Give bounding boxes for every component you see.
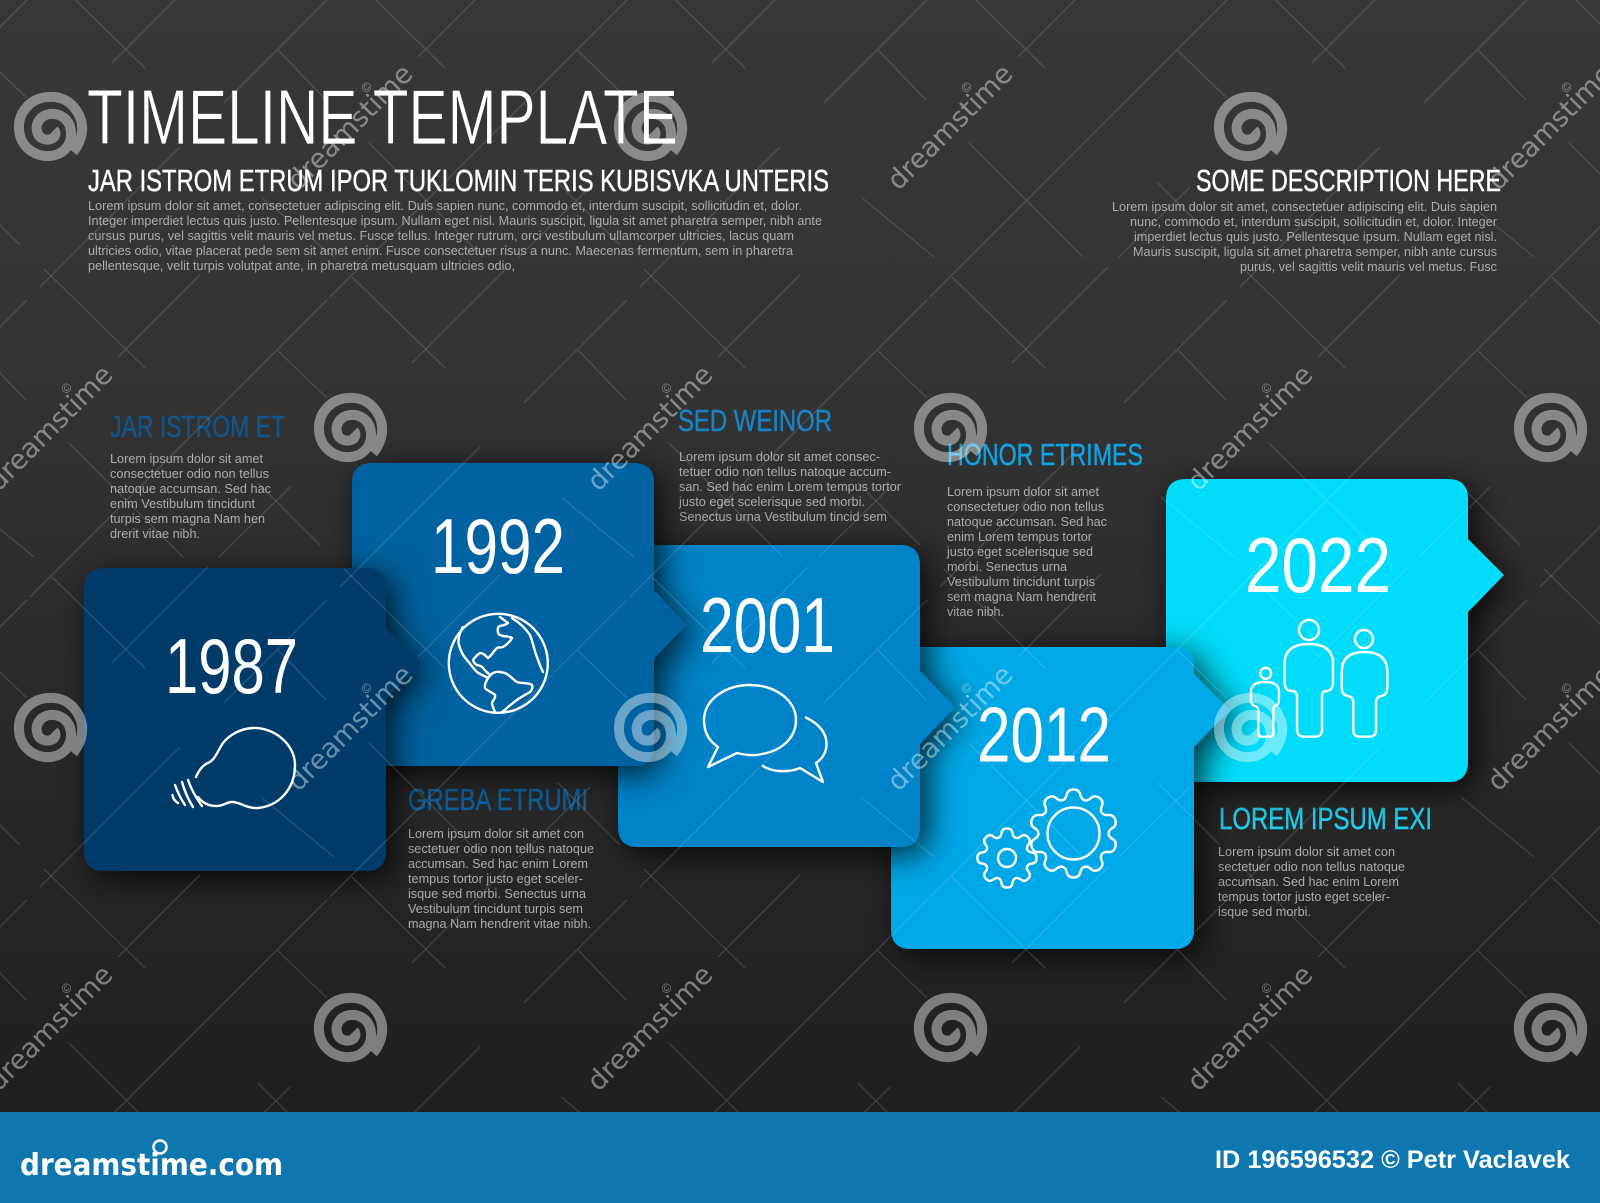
watermark overlay: © (1258, 979, 1275, 997)
watermark overlay: dreamstime (281, 659, 419, 797)
year 1987: 1987 (165, 622, 298, 710)
text block: HONOR ETRIMES: natoque accumsan. Sed hac (947, 515, 1107, 529)
footer bar (0, 1112, 1600, 1203)
right description block: purus, vel sagittis velit mauris vel metus. Fusc (1240, 260, 1497, 274)
text block: SED WEINOR: tetuer odio non tellus natoque accum- (679, 465, 891, 479)
footer credit: ID 196596532 © Petr Vaclavek (1215, 1146, 1570, 1174)
year 1992: 1992 (431, 502, 565, 590)
watermark overlay: dreamstime (1181, 359, 1319, 497)
title: TIMELINE TEMPLATE (87, 73, 678, 161)
text block: GREBA ETRUMI: tempus tortor justo eget sceler- (408, 872, 583, 886)
watermark overlay: © (58, 979, 75, 997)
text block: LOREM IPSUM EXI: isque sed morbi. (1218, 905, 1311, 919)
text block: HONOR ETRIMES: vitae nibh. (947, 605, 1004, 619)
year 2001: 2001 (700, 581, 835, 669)
text block: SED WEINOR: SED WEINOR (678, 403, 832, 438)
text block: SED WEINOR (678, 403, 901, 524)
intro text block: ultricies odio, vitae placerat pede sem sit amet enim. Fusce consectetuer risus a nunc. Maecenas fermentum, sem in pharetra (88, 244, 793, 258)
text block: GREBA ETRUMI: accumsan. Sed hac enim Lorem (408, 857, 588, 871)
panel: 2022 (1166, 479, 1504, 782)
watermark overlay: dreamstime (1181, 959, 1319, 1097)
watermark overlay: © (1258, 379, 1275, 397)
right description block (1112, 200, 1497, 274)
watermark overlay: © (958, 78, 975, 96)
icon: globe (449, 614, 548, 713)
text block: HONOR ETRIMES (946, 437, 1143, 619)
text block: GREBA ETRUMI (408, 782, 594, 931)
text block: HONOR ETRIMES: sem magna Nam hendrerit (947, 590, 1096, 604)
text block: HONOR ETRIMES: enim Lorem tempus tortor (947, 530, 1092, 544)
text block: JAR ISTROM ET (110, 409, 285, 541)
right description block: nunc, commodo et, interdum suscipit, sollicitudin et, dolor. Integer (1130, 215, 1497, 229)
intro text block: Lorem ipsum dolor sit amet, consectetuer adipiscing elit. Duis sapien nunc, commodo et, interdum suscipit, sollicitudin et, dolor. (88, 199, 802, 213)
right description block: Lorem ipsum dolor sit amet, consectetuer adipiscing elit. Duis sapien (1112, 200, 1497, 214)
watermark overlay: © (1558, 679, 1575, 697)
text block: LOREM IPSUM EXI: sectetuer odio non tellus natoque (1218, 860, 1405, 874)
text block: JAR ISTROM ET: drerit vitae nibh. (110, 527, 200, 541)
text block: SED WEINOR: Lorem ipsum dolor sit amet consec- (679, 450, 880, 464)
panel: 1987 (84, 568, 421, 871)
watermark overlay: © (358, 78, 375, 96)
right description block: imperdiet lectus quis justo. Pellentesque ipsum. Nullam eget nisl. (1134, 230, 1497, 244)
icon: gears (977, 790, 1119, 888)
text block: HONOR ETRIMES: HONOR ETRIMES (947, 437, 1143, 472)
watermark overlay: dreamstime (281, 58, 419, 196)
text block: GREBA ETRUMI: Lorem ipsum dolor sit amet con (408, 827, 584, 841)
panel: 1992 (352, 463, 686, 766)
text block: SED WEINOR: justo eget scelerisque sed morbi. (678, 495, 865, 509)
watermark overlay: dreamstime (881, 58, 1019, 196)
year 2022: 2022 (1245, 521, 1391, 609)
watermark overlay: © (358, 679, 375, 697)
text block: LOREM IPSUM EXI: tempus tortor justo eget sceler- (1218, 890, 1390, 904)
year 2012: 2012 (977, 690, 1111, 778)
text block: SED WEINOR: Senectus urna Vestibulum tincid sem (679, 510, 887, 524)
intro text block (88, 199, 822, 273)
text block: GREBA ETRUMI: GREBA ETRUMI (408, 782, 588, 817)
watermark overlay: dreamstime (581, 959, 719, 1097)
subtitle: JAR ISTROM ETRUM IPOR TUKLOMIN TERIS KUBISVKA UNTERIS (88, 163, 829, 198)
icon: speech bubbles (704, 685, 827, 782)
watermark overlay: © (658, 379, 675, 397)
text block: JAR ISTROM ET: turpis sem magna Nam hen (110, 512, 265, 526)
right heading: SOME DESCRIPTION HERE (1196, 163, 1501, 198)
text block: JAR ISTROM ET: consectetuer odio non tellus (110, 467, 269, 481)
intro text block: Integer imperdiet lectus quis justo. Pellentesque ipsum. Nullam eget nisl. Mauris suscipit, ligula sit amet pharetra semper, nibh ante (88, 214, 822, 228)
text block: JAR ISTROM ET: natoque accumsan. Sed hac (110, 482, 271, 496)
text block: HONOR ETRIMES: Lorem ipsum dolor sit amet (947, 485, 1099, 499)
text block: GREBA ETRUMI: Vestibulum tincidunt turpis sem (408, 902, 583, 916)
text block: JAR ISTROM ET: enim Vestibulum tincidunt (110, 497, 256, 511)
right description block: Mauris suscipit, ligula sit amet pharetra semper, nibh ante cursus (1133, 245, 1497, 259)
watermark overlay: © (1558, 78, 1575, 96)
watermark overlay: © (658, 979, 675, 997)
panel: 2001 (618, 545, 955, 847)
text block: HONOR ETRIMES: Vestibulum tincidunt turpis (947, 575, 1095, 589)
text block: LOREM IPSUM EXI: accumsan. Sed hac enim Lorem (1218, 875, 1399, 889)
text block: HONOR ETRIMES: justo eget scelerisque sed (946, 545, 1093, 559)
intro text block: pellentesque, velit turpis volutpat ante, in pharetra metusquam ultricies odio, (88, 259, 515, 273)
text block: GREBA ETRUMI: sectetuer odio non tellus natoque (408, 842, 594, 856)
text block: HONOR ETRIMES: consectetuer odio non tellus (947, 500, 1104, 514)
text block: JAR ISTROM ET: JAR ISTROM ET (110, 409, 285, 444)
text block: LOREM IPSUM EXI: LOREM IPSUM EXI (1219, 801, 1432, 836)
footer logo: dreamstime.com (20, 1148, 283, 1183)
text block: SED WEINOR: san. Sed hac enim Lorem tempus tortor (679, 480, 901, 494)
icon: family (1251, 620, 1387, 737)
watermark overlay: © (58, 379, 75, 397)
text block: GREBA ETRUMI: isque sed morbi. Senectus urna (408, 887, 586, 901)
panel: 2012 (891, 647, 1230, 949)
text block: LOREM IPSUM EXI: Lorem ipsum dolor sit amet con (1218, 845, 1395, 859)
intro text block: cursus purus, vel sagittis velit mauris vel metus. Fusce tellus. Integer rutrum, orci vestibulum ullamcorper ultricies, lacus quam (88, 229, 794, 243)
icon: light bulb (172, 728, 295, 808)
watermark overlay: dreamstime (881, 659, 1019, 797)
watermark overlay: dreamstime (581, 359, 719, 497)
text block: LOREM IPSUM EXI (1218, 801, 1432, 919)
text block: GREBA ETRUMI: magna Nam hendrerit vitae nibh. (408, 917, 591, 931)
text block: JAR ISTROM ET: Lorem ipsum dolor sit amet (110, 452, 263, 466)
watermark overlay: © (958, 679, 975, 697)
text block: HONOR ETRIMES: morbi. Senectus urna (947, 560, 1067, 574)
